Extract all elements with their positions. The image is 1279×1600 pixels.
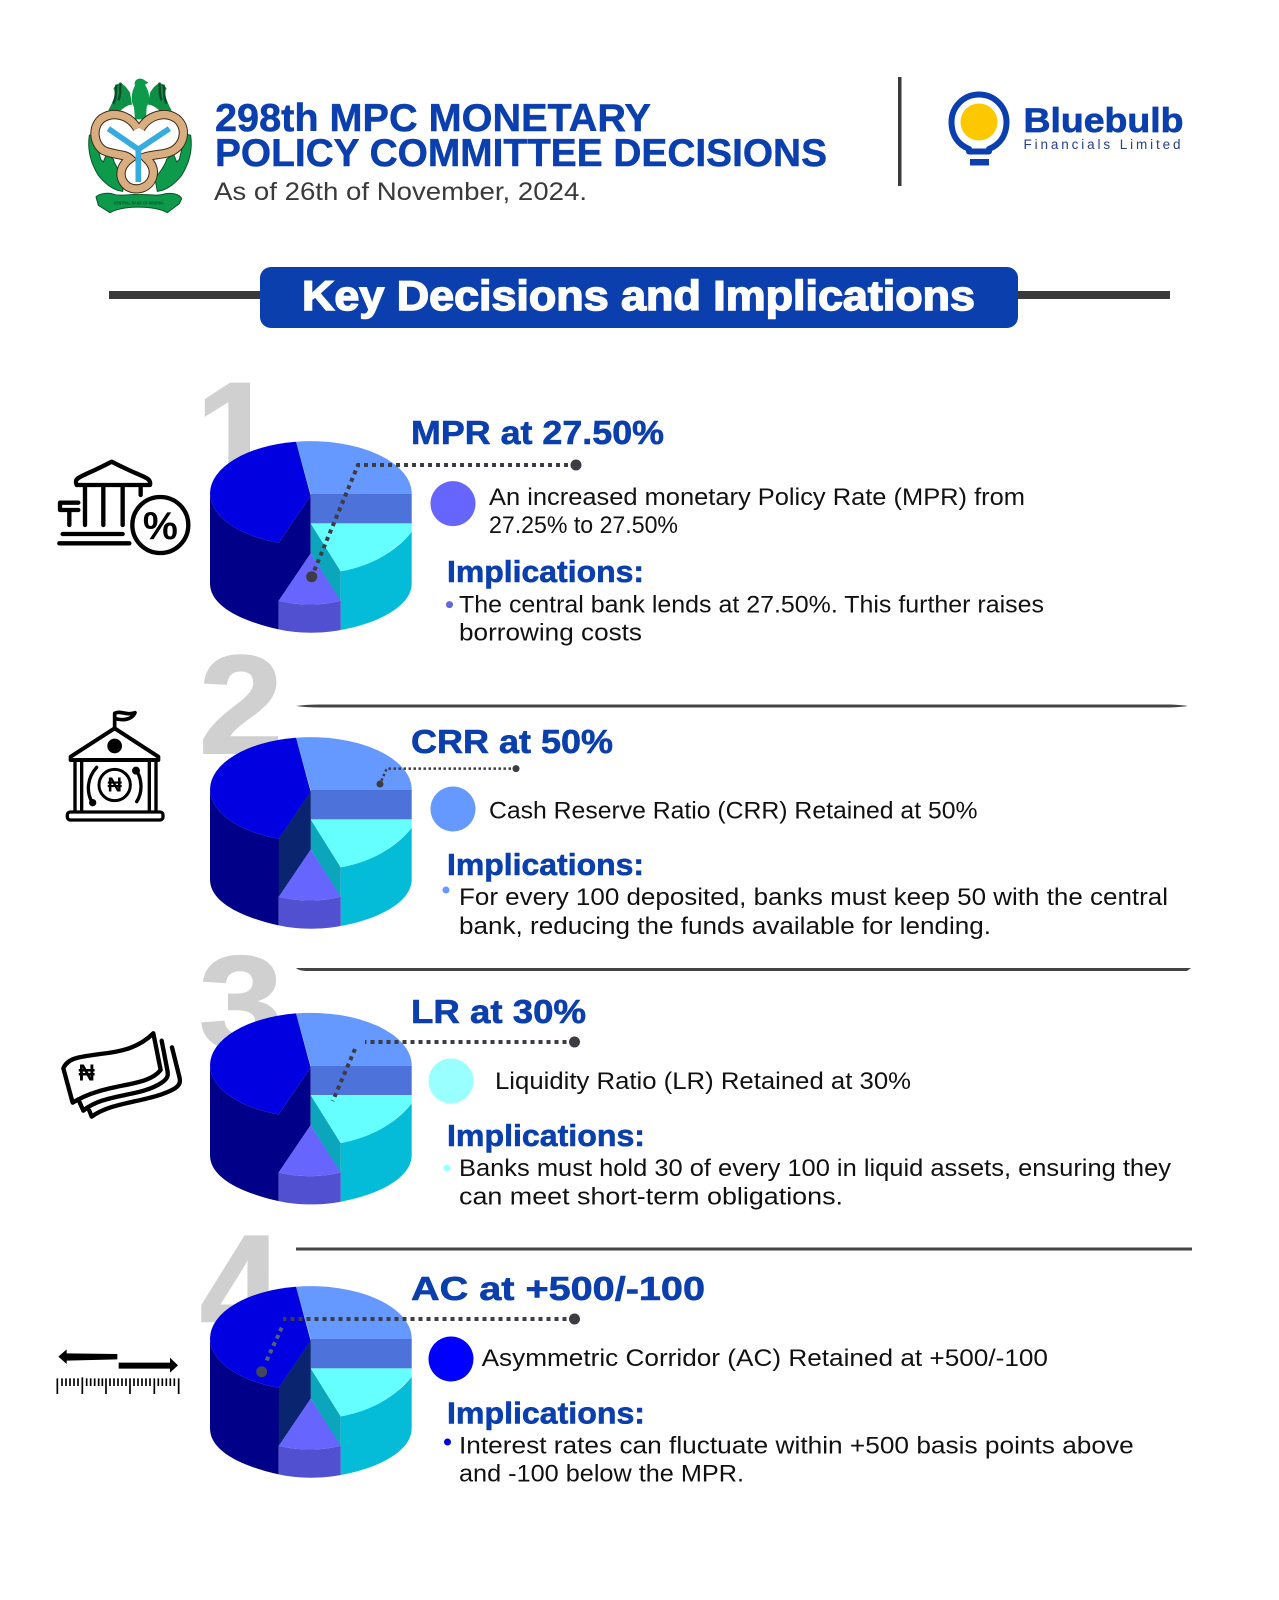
implications xyxy=(444,1396,1134,1488)
icon: bank with percent: % xyxy=(143,504,178,548)
implications: The central bank lends at 27.50%. This further raises xyxy=(459,592,1044,618)
implications: Implications: xyxy=(447,554,644,589)
title: 298th MPC MONETARY xyxy=(215,97,651,140)
header: Central Bank of Nigeria logo xyxy=(89,79,191,213)
large number 1: 1 xyxy=(196,354,276,513)
Bluebulb logo: Financials Limited xyxy=(1024,137,1180,152)
hands xyxy=(89,134,191,191)
section heading banner xyxy=(260,267,1018,328)
legend dot xyxy=(428,1336,474,1382)
panel: 3 LR xyxy=(63,929,1171,1211)
panel: 4 AC xyxy=(57,1203,1134,1488)
legend dot xyxy=(430,481,476,526)
title: POLICY COMMITTEE DECISIONS xyxy=(215,132,827,175)
implications: borrowing costs xyxy=(459,620,642,646)
legend dot xyxy=(430,786,476,832)
divider xyxy=(296,968,1191,971)
implications: Implications: xyxy=(447,1396,645,1431)
section heading banner: Key Decisions and Implications xyxy=(302,272,975,319)
divider xyxy=(296,704,1188,708)
pie chart xyxy=(210,1013,412,1204)
implications: For every 100 deposited, banks must keep 50 with the central xyxy=(459,884,1168,911)
implications xyxy=(446,554,1044,646)
Bluebulb logo: Bluebulb xyxy=(1024,102,1184,140)
description xyxy=(489,484,1025,539)
implications xyxy=(442,847,1168,940)
pointer line xyxy=(256,1314,580,1377)
implications xyxy=(444,1118,1171,1211)
description: Liquidity Ratio (LR) Retained at 30% xyxy=(495,1068,911,1095)
icon: central bank building xyxy=(67,712,163,820)
icon: bank with percent xyxy=(59,462,188,553)
description: An increased monetary Policy Rate (MPR) from xyxy=(489,484,1025,511)
section heading rule xyxy=(109,291,1170,299)
knot xyxy=(95,115,183,189)
description: Cash Reserve Ratio (CRR) Retained at 50% xyxy=(489,798,978,825)
large number 3: 3 xyxy=(199,929,283,1076)
implications: Implications: xyxy=(447,847,644,882)
header divider xyxy=(898,77,902,186)
icon: naira notes: ₦ xyxy=(78,1060,95,1086)
description: Asymmetric Corridor (AC) Retained at +500/-100 xyxy=(482,1345,1048,1372)
icon: light bulb xyxy=(952,94,1006,166)
heading: LR at 30% xyxy=(411,993,586,1030)
pointer line xyxy=(306,460,582,582)
panel: 2 CRR xyxy=(67,626,1168,940)
pointer line xyxy=(333,1036,580,1101)
implications: and -100 below the MPR. xyxy=(459,1460,744,1488)
date subtitle: As of 26th of November, 2024. xyxy=(214,178,587,206)
implications: Interest rates can fluctuate within +500 basis points above xyxy=(459,1433,1134,1460)
implications: Implications: xyxy=(447,1118,645,1153)
legend dot xyxy=(428,1058,474,1104)
pointer line xyxy=(376,765,520,788)
icon: naira notes xyxy=(63,1033,180,1117)
pie chart with wall xyxy=(210,1286,412,1478)
Bluebulb logo xyxy=(952,94,1184,166)
pie chart with wall xyxy=(210,737,412,929)
ribbon: CENTRAL BANK OF NIGERIA xyxy=(114,201,164,207)
panel: 1 MPR xyxy=(59,354,1044,646)
pie chart xyxy=(210,441,412,633)
description: 27.25% to 27.50% xyxy=(489,512,678,539)
icon: corridor arrows and scale xyxy=(57,1349,179,1394)
large number 4: 4 xyxy=(200,1203,282,1376)
implications: Banks must hold 30 of every 100 in liquid assets, ensuring they xyxy=(459,1155,1171,1182)
title xyxy=(215,97,827,175)
blue Y xyxy=(108,129,169,182)
heading: AC at +500/-100 xyxy=(411,1270,705,1307)
heading: CRR at 50% xyxy=(411,723,613,760)
icon: central bank building: ₦ xyxy=(107,775,122,797)
eagle xyxy=(108,79,172,119)
large number 2: 2 xyxy=(199,626,283,783)
heading: MPR at 27.50% xyxy=(411,414,664,451)
divider xyxy=(296,1248,1192,1250)
implications: can meet short-term obligations. xyxy=(459,1184,843,1211)
implications: bank, reducing the funds available for lending. xyxy=(459,913,991,940)
